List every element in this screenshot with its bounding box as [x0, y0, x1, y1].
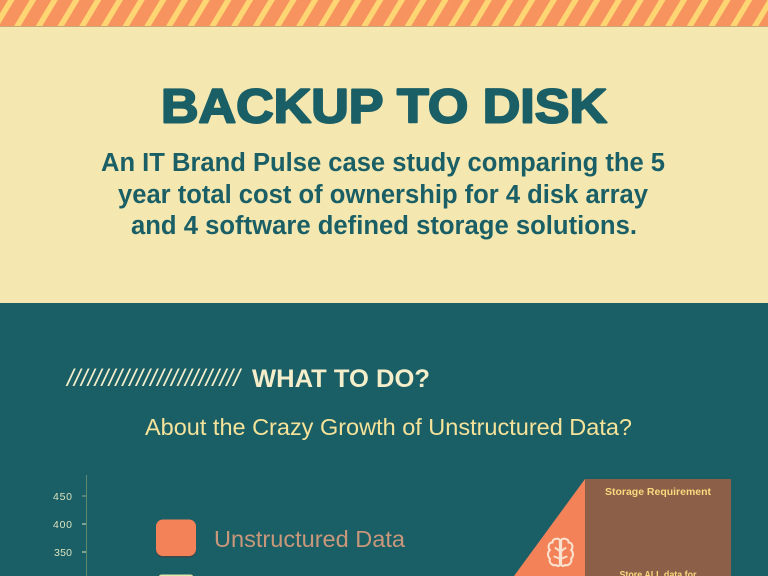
chart axis: 350	[54, 547, 72, 559]
chart axis: 400	[53, 519, 72, 531]
title: BACKUP TO DISK	[161, 80, 607, 134]
section subheading: About the Crazy Growth of Unstructured Data?	[145, 414, 632, 440]
teal section background	[0, 303, 768, 576]
legend: second swatch	[158, 574, 194, 576]
legend: unstructured data: Unstructured Data	[214, 526, 405, 552]
chart axis: 450	[53, 491, 72, 503]
subtitle: year total cost of ownership for 4 disk array	[118, 181, 649, 209]
chart axis	[53, 475, 86, 576]
panel: storage requirement: Storage Requirement	[605, 486, 711, 498]
subtitle: and 4 software defined storage solutions.	[131, 212, 637, 240]
section heading: WHAT TO DO?	[252, 365, 430, 393]
panel: storage requirement	[585, 479, 731, 576]
subtitle: An IT Brand Pulse case study comparing the 5	[101, 149, 665, 177]
legend: unstructured data	[156, 520, 405, 558]
subtitle	[101, 149, 665, 240]
icon: brain	[548, 539, 573, 566]
section slashes: /////////////////////////	[65, 365, 242, 392]
orange wedge	[514, 479, 585, 576]
striped top band	[0, 0, 768, 27]
cream header background	[0, 0, 768, 303]
